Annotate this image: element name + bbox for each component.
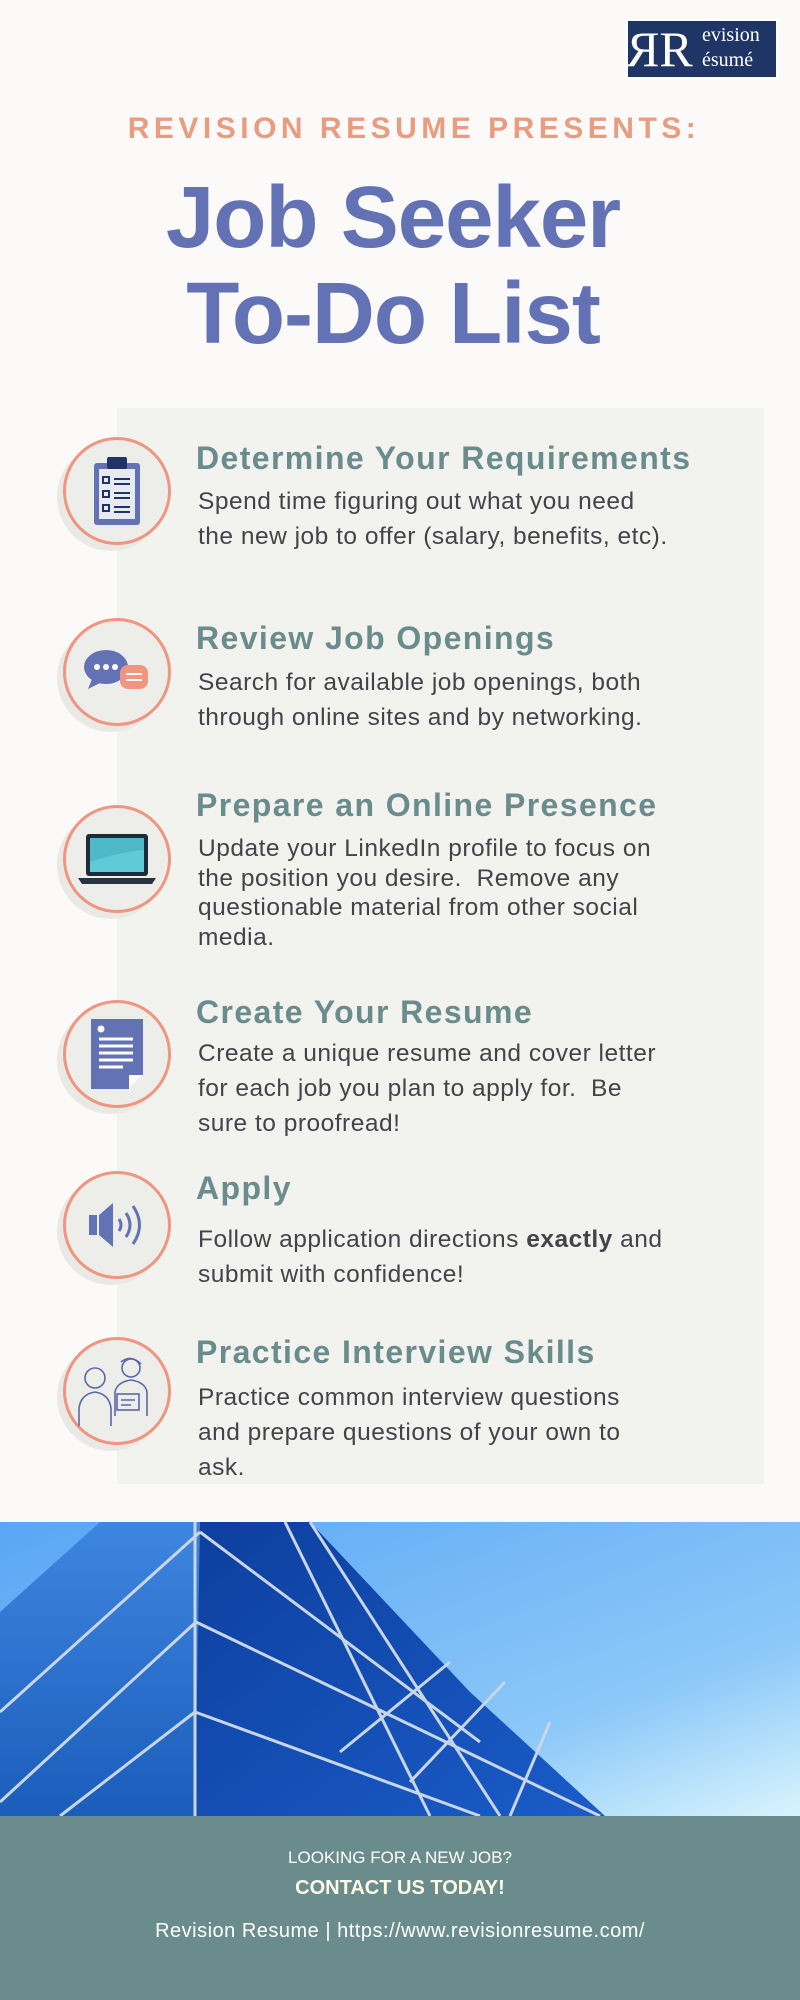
footer: LOOKING FOR A NEW JOB?	[288, 1848, 512, 1867]
heading 5: Apply	[196, 1170, 292, 1206]
title: To-Do List	[186, 265, 600, 362]
title: Job Seeker	[166, 169, 620, 266]
heading 4: Create Your Resume	[196, 994, 533, 1030]
icon: chat bubbles	[63, 618, 171, 726]
heading 3: Prepare an Online Presence	[196, 787, 658, 823]
heading 2: Review Job Openings	[196, 620, 555, 656]
icon: speaker	[63, 1171, 171, 1279]
text 1: Spend time figuring out what you need the new job to offer (salary, benefits, etc).	[198, 488, 668, 550]
subtitle: REVISION RESUME PRESENTS:	[128, 112, 700, 145]
icon: laptop	[63, 805, 171, 913]
text 6: Practice common interview questions and prepare questions of your own to ask.	[198, 1384, 621, 1481]
text 3: Update your LinkedIn profile to focus on the position you desire. Remove any questionable material from other social media.	[198, 835, 651, 950]
icon: interview	[63, 1337, 171, 1445]
panel: to-do list	[117, 408, 764, 1484]
heading 1: Determine Your Requirements	[196, 440, 691, 476]
logo: ésumé	[702, 49, 753, 71]
text 2: Search for available job openings, both through online sites and by networking.	[198, 669, 642, 731]
photo: glass building	[0, 1522, 800, 1816]
logo: R	[659, 21, 687, 77]
logo	[625, 18, 779, 80]
logo: evision	[702, 24, 760, 46]
footer	[0, 1816, 800, 2000]
text 5: Follow application directions exactly and submit with confidence!	[198, 1226, 663, 1288]
footer: CONTACT US TODAY!	[295, 1877, 505, 1899]
title	[166, 169, 620, 362]
logo: R	[632, 21, 659, 77]
icon: document	[63, 1000, 171, 1108]
footer: Revision Resume | https://www.revisionresume.com/	[155, 1920, 645, 1942]
icon: clipboard	[63, 437, 171, 545]
text 4: Create a unique resume and cover letter for each job you plan to apply for. Be sure to proofread!	[198, 1040, 656, 1137]
heading 6: Practice Interview Skills	[196, 1334, 596, 1370]
